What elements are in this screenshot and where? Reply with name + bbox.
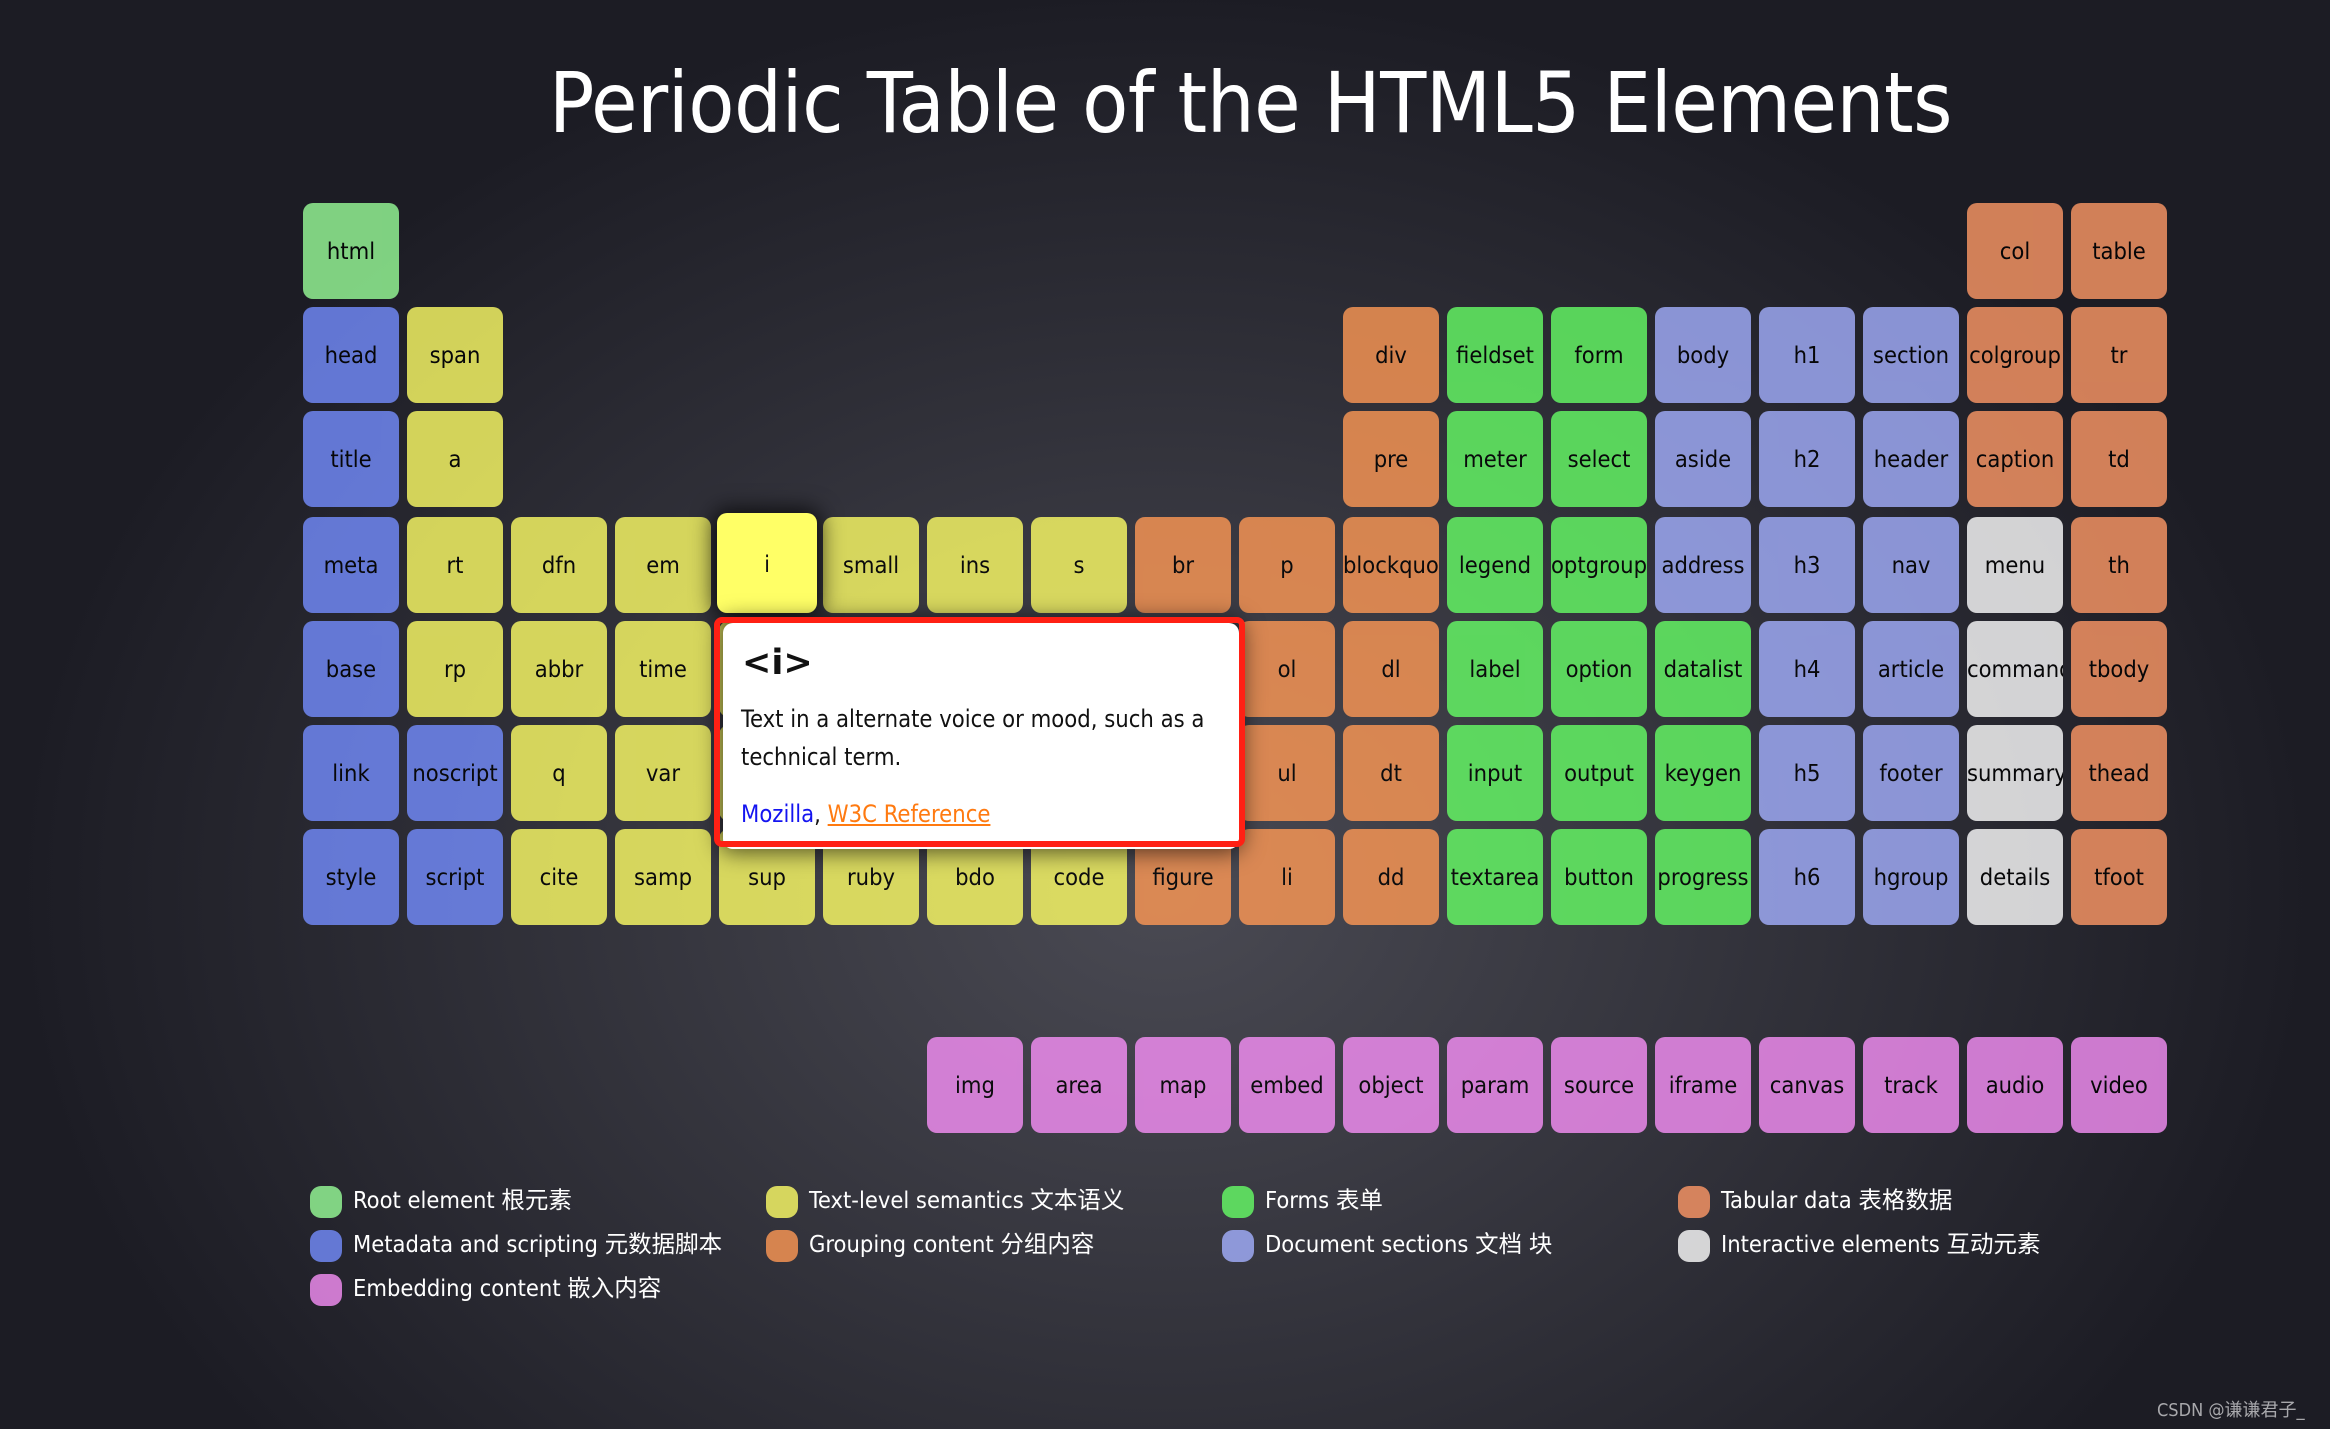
- tile: dfn: [511, 517, 607, 613]
- legend item: forms: Forms 表单: [1265, 1186, 1383, 1214]
- tile: a: [407, 411, 503, 507]
- tile: li: li: [1281, 863, 1293, 891]
- tile: abbr: [511, 621, 607, 717]
- tile: ins: ins: [960, 551, 990, 579]
- tile: li: [1239, 829, 1335, 925]
- tile: form: [1551, 307, 1647, 403]
- tile: input: [1447, 725, 1543, 821]
- popup heading: <i>: [742, 643, 813, 683]
- tile: optgroup: optgroup: [1551, 551, 1647, 579]
- tile: base: base: [326, 655, 376, 683]
- tile: hgroup: hgroup: [1874, 863, 1948, 891]
- tile: covered by popup, column 7 row 5: [927, 621, 1023, 717]
- legend item: tabular data: Tabular data 表格数据: [1721, 1186, 1952, 1214]
- popup links: Mozilla, W3C Reference: [741, 800, 990, 828]
- tile: tr: [2071, 307, 2167, 403]
- tile: source: [1551, 1037, 1647, 1133]
- tile: ol: [1239, 621, 1335, 717]
- tile: td: td: [2108, 445, 2130, 473]
- tile: pre: pre: [1374, 445, 1408, 473]
- tile: tbody: tbody: [2089, 655, 2149, 683]
- tile: thead: thead: [2088, 759, 2150, 787]
- tile: tfoot: tfoot: [2094, 863, 2144, 891]
- tile: dt: dt: [1380, 759, 1402, 787]
- tile: time: time: [639, 655, 687, 683]
- tile: output: [1551, 725, 1647, 821]
- highlighted tile: i: [717, 513, 817, 613]
- tile: address: address: [1661, 551, 1745, 579]
- tile: code: [1031, 829, 1127, 925]
- tile: rt: [407, 517, 503, 613]
- tile: small: small: [843, 551, 899, 579]
- tile: footer: [1863, 725, 1959, 821]
- tile: img: [927, 1037, 1023, 1133]
- tile: h5: h5: [1794, 759, 1820, 787]
- tile: q: [511, 725, 607, 821]
- legend item: grouping content: Grouping content 分组内容: [809, 1230, 1094, 1258]
- tile: progress: [1655, 829, 1751, 925]
- tile: cite: cite: [540, 863, 578, 891]
- tile: form: form: [1574, 341, 1624, 369]
- tile: tfoot: [2071, 829, 2167, 925]
- tile: style: [303, 829, 399, 925]
- tile: footer: footer: [1879, 759, 1943, 787]
- tile: optgroup: [1551, 517, 1647, 613]
- tile: covered by popup, column 5 row 6: [719, 725, 815, 821]
- tile: br: [1135, 517, 1231, 613]
- tile: em: em: [646, 551, 680, 579]
- tile: meter: meter: [1463, 445, 1527, 473]
- tile: h4: h4: [1794, 655, 1820, 683]
- tile: legend: legend: [1459, 551, 1531, 579]
- tile: progress: progress: [1657, 863, 1749, 891]
- tile: title: [303, 411, 399, 507]
- tile: ul: [1239, 725, 1335, 821]
- tile: aside: [1655, 411, 1751, 507]
- tile: samp: samp: [634, 863, 692, 891]
- tile: dd: dd: [1378, 863, 1404, 891]
- tile: a: a: [449, 445, 461, 473]
- tile: var: var: [646, 759, 680, 787]
- tile: img: img: [955, 1071, 995, 1099]
- tile: s: s: [1073, 551, 1084, 579]
- tile: hgroup: [1863, 829, 1959, 925]
- tile: param: param: [1461, 1071, 1529, 1099]
- tile: link: link: [332, 759, 370, 787]
- legend item: root element: Root element 根元素: [353, 1186, 572, 1214]
- tile: ruby: [823, 829, 919, 925]
- tile: iframe: [1655, 1037, 1751, 1133]
- tile: cite: [511, 829, 607, 925]
- tile: option: [1551, 621, 1647, 717]
- tile: sup: [719, 829, 815, 925]
- tile: textarea: textarea: [1451, 863, 1539, 891]
- tile: summary: [1967, 725, 2063, 821]
- tile: link: [303, 725, 399, 821]
- tile: map: map: [1160, 1071, 1206, 1099]
- tile: span: [407, 307, 503, 403]
- tile: var: [615, 725, 711, 821]
- tile: select: [1551, 411, 1647, 507]
- tile: keygen: keygen: [1665, 759, 1741, 787]
- tile: video: video: [2090, 1071, 2148, 1099]
- legend item: interactive elements: Interactive elements 互动元素: [1721, 1230, 2041, 1258]
- tile: h1: [1759, 307, 1855, 403]
- tile: code: code: [1054, 863, 1104, 891]
- tile: covered by popup, column 5 row 5: [719, 621, 815, 717]
- tile: col: col: [2000, 237, 2030, 265]
- tile: fieldset: [1447, 307, 1543, 403]
- tile: p: [1239, 517, 1335, 613]
- tile: menu: menu: [1985, 551, 2045, 579]
- tile: table: table: [2092, 237, 2146, 265]
- tile: bdo: bdo: [955, 863, 995, 891]
- tile: html: [303, 203, 399, 299]
- tile: em: [615, 517, 711, 613]
- legend item: metadata and scripting: Metadata and scripting 元数据脚本: [353, 1230, 722, 1258]
- tile: canvas: [1759, 1037, 1855, 1133]
- tile: dfn: dfn: [542, 551, 576, 579]
- tile: figure: [1135, 829, 1231, 925]
- tile: h6: h6: [1794, 863, 1820, 891]
- tile: article: article: [1878, 655, 1944, 683]
- tile: option: option: [1566, 655, 1632, 683]
- tile: h2: h2: [1794, 445, 1820, 473]
- tile: h2: [1759, 411, 1855, 507]
- highlighted tile: i: i: [764, 550, 770, 578]
- tile: object: [1343, 1037, 1439, 1133]
- tile: rp: [407, 621, 503, 717]
- popup: element description: [723, 623, 1239, 849]
- title: Periodic Table of the HTML5 Elements: [549, 54, 1952, 152]
- tile: head: head: [325, 341, 377, 369]
- tile: base: [303, 621, 399, 717]
- tile: audio: [1967, 1037, 2063, 1133]
- tile: video: [2071, 1037, 2167, 1133]
- legend item: document sections: Document sections 文档 块: [1265, 1230, 1552, 1258]
- tile: colgroup: colgroup: [1969, 341, 2061, 369]
- tile: map: [1135, 1037, 1231, 1133]
- tile: source: source: [1564, 1071, 1634, 1099]
- tile: label: label: [1469, 655, 1521, 683]
- tile: label: [1447, 621, 1543, 717]
- tile: datalist: [1655, 621, 1751, 717]
- tile: ul: ul: [1277, 759, 1297, 787]
- tile: track: track: [1884, 1071, 1938, 1099]
- tile: noscript: [407, 725, 503, 821]
- tile: dd: [1343, 829, 1439, 925]
- tile: canvas: canvas: [1770, 1071, 1844, 1099]
- tile: col: [1967, 203, 2063, 299]
- tile: dl: [1343, 621, 1439, 717]
- tile: nav: nav: [1892, 551, 1930, 579]
- tile: header: header: [1874, 445, 1948, 473]
- tile: span: span: [430, 341, 480, 369]
- legend item: embedding content: Embedding content 嵌入内容: [353, 1274, 661, 1302]
- tile: title: title: [330, 445, 372, 473]
- tile: h3: [1759, 517, 1855, 613]
- tile: select: select: [1568, 445, 1630, 473]
- tile: td: [2071, 411, 2167, 507]
- legend item: text-level semantics: Text-level semantics 文本语义: [809, 1186, 1124, 1214]
- tile: blockquote: [1343, 517, 1439, 613]
- tile: abbr: abbr: [535, 655, 583, 683]
- tile: command: [1967, 621, 2063, 717]
- tile: dl: dl: [1381, 655, 1401, 683]
- tile: colgroup: [1967, 307, 2063, 403]
- tile: p: p: [1280, 551, 1294, 579]
- tile: covered by popup, column 6 row 5: [823, 621, 919, 717]
- tile: h6: [1759, 829, 1855, 925]
- tile: address: [1655, 517, 1751, 613]
- tile: ol: ol: [1278, 655, 1296, 683]
- tile: param: [1447, 1037, 1543, 1133]
- tile: input: input: [1468, 759, 1522, 787]
- tile: header: [1863, 411, 1959, 507]
- tile: button: button: [1564, 863, 1634, 891]
- tile: h5: [1759, 725, 1855, 821]
- tile: details: details: [1980, 863, 2050, 891]
- tile: rt: rt: [446, 551, 463, 579]
- tile: audio: audio: [1986, 1071, 2044, 1099]
- tile: datalist: datalist: [1664, 655, 1742, 683]
- tile: head: [303, 307, 399, 403]
- tile: section: [1863, 307, 1959, 403]
- tile: ins: [927, 517, 1023, 613]
- tile: time: [615, 621, 711, 717]
- tile: dt: [1343, 725, 1439, 821]
- tile: embed: [1239, 1037, 1335, 1133]
- tile: h3: h3: [1794, 551, 1820, 579]
- tile: aside: aside: [1675, 445, 1731, 473]
- tile: div: [1343, 307, 1439, 403]
- legend item: forms: [1222, 1186, 1383, 1218]
- tile: body: body: [1677, 341, 1729, 369]
- tile: button: [1551, 829, 1647, 925]
- tile: legend: [1447, 517, 1543, 613]
- tile: keygen: [1655, 725, 1751, 821]
- tile: sup: sup: [748, 863, 786, 891]
- tile: script: [407, 829, 503, 925]
- tile: bdo: [927, 829, 1023, 925]
- tile: body: [1655, 307, 1751, 403]
- tile: section: section: [1873, 341, 1949, 369]
- tile: html: html: [327, 237, 375, 265]
- tile: h1: h1: [1794, 341, 1820, 369]
- tile: s: [1031, 517, 1127, 613]
- tile: th: th: [2108, 551, 2130, 579]
- tile: embed: embed: [1250, 1071, 1324, 1099]
- tile: article: [1863, 621, 1959, 717]
- tile: nav: [1863, 517, 1959, 613]
- tile: area: area: [1055, 1071, 1103, 1099]
- tile: textarea: [1447, 829, 1543, 925]
- tile: small: [823, 517, 919, 613]
- tile: pre: [1343, 411, 1439, 507]
- popup description: Text in a alternate voice or mood, such as a technical term.: [741, 705, 1204, 771]
- tile: covered by popup, column 8 row 5: [1031, 621, 1127, 717]
- tile: track: [1863, 1037, 1959, 1133]
- tile: script: script: [426, 863, 484, 891]
- tile: tbody: [2071, 621, 2167, 717]
- watermark: CSDN @谦谦君子_: [2157, 1400, 2305, 1421]
- tile: menu: [1967, 517, 2063, 613]
- tile: caption: caption: [1976, 445, 2054, 473]
- tile: iframe: iframe: [1669, 1071, 1737, 1099]
- tile: fieldset: fieldset: [1456, 341, 1534, 369]
- tile: q: q: [552, 759, 566, 787]
- tile: details: [1967, 829, 2063, 925]
- tile: table: [2071, 203, 2167, 299]
- tile: covered by popup, column 9 row 5: [1135, 621, 1231, 717]
- tile: style: style: [326, 863, 376, 891]
- tile: th: [2071, 517, 2167, 613]
- tile: ruby: ruby: [847, 863, 895, 891]
- tile: area: [1031, 1037, 1127, 1133]
- tile: thead: [2071, 725, 2167, 821]
- tile: figure: figure: [1152, 863, 1214, 891]
- tile: tr: tr: [2110, 341, 2127, 369]
- tile: caption: [1967, 411, 2063, 507]
- tile: meta: meta: [324, 551, 378, 579]
- tile: noscript: noscript: [412, 759, 498, 787]
- tile: br: br: [1172, 551, 1194, 579]
- tile: meta: [303, 517, 399, 613]
- tile: meter: [1447, 411, 1543, 507]
- tile: samp: [615, 829, 711, 925]
- tile: output: output: [1564, 759, 1634, 787]
- tile: object: object: [1358, 1071, 1424, 1099]
- tile: rp: rp: [444, 655, 466, 683]
- callout: red highlight rectangle: [714, 617, 1245, 847]
- tile: div: div: [1375, 341, 1407, 369]
- tile: h4: [1759, 621, 1855, 717]
